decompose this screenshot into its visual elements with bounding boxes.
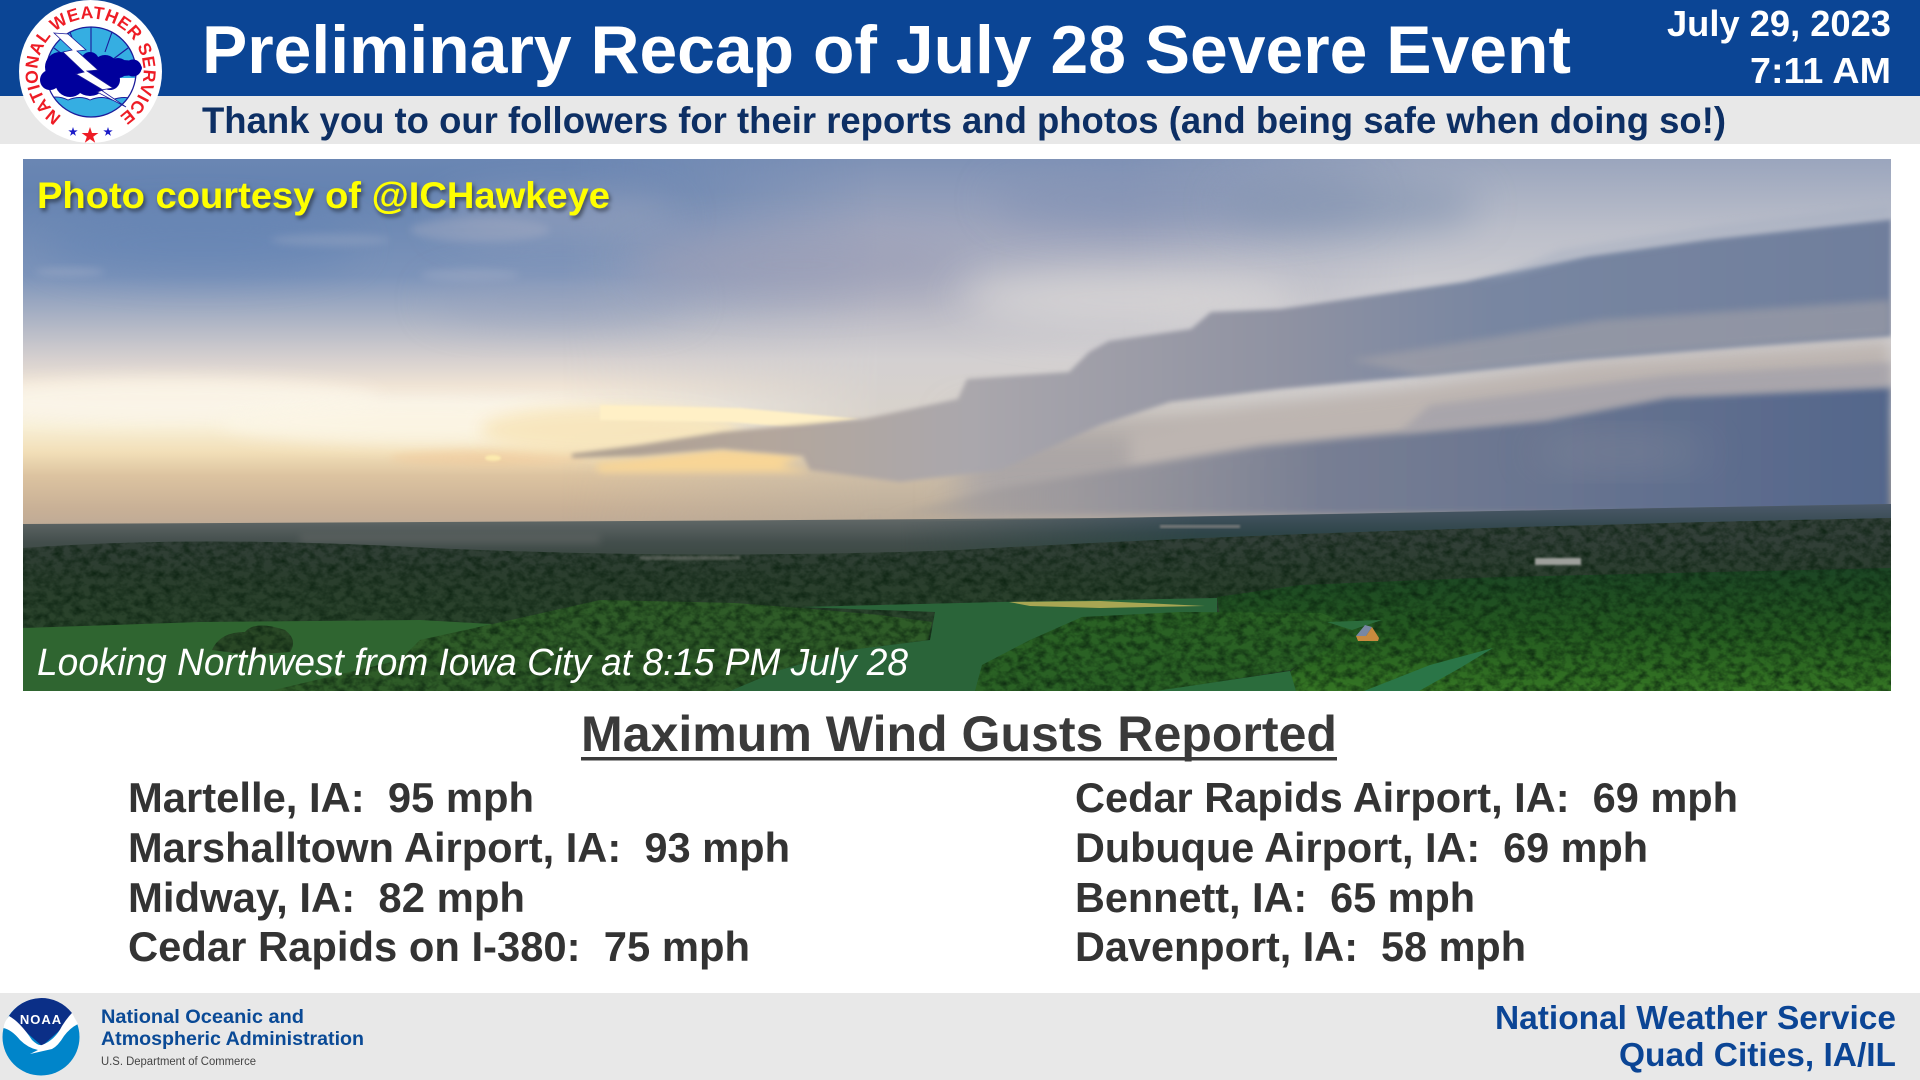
subtitle: Thank you to our followers for their reports and photos (and being safe when doing so!) [202, 99, 1726, 141]
distant hills [23, 504, 1891, 554]
sunset gaps [480, 405, 860, 472]
NOAA agency text: U.S. Department of Commerce [101, 1056, 256, 1068]
dark mid-distance forest [23, 518, 1891, 691]
wind gusts list: right column: Cedar Rapids Airport, IA: 69 mph [1075, 774, 1738, 821]
photo credit caption: Photo courtesy of @ICHawkeye [37, 175, 610, 216]
wind gusts list: right column: Davenport, IA: 58 mph [1075, 923, 1526, 970]
wind gusts list: left column: Marshalltown Airport, IA: 93 mph [128, 824, 790, 871]
centre field [730, 598, 1217, 691]
date and time: 7:11 AM [1750, 50, 1891, 91]
NOAA agency text: Atmospheric Administration [101, 1029, 364, 1050]
distant buildings [640, 525, 1581, 565]
wind gusts list: left column [128, 774, 790, 970]
office name: National Weather Service [1495, 1000, 1896, 1037]
icon: NOAA logo: NOAA [20, 1012, 62, 1027]
NOAA agency text [101, 1007, 364, 1068]
icon: NOAA logo [2, 998, 80, 1076]
sky [0, 159, 1891, 539]
shelf cloud: upper band [572, 205, 1891, 482]
office name: Quad Cities, IA/IL [1619, 1037, 1896, 1074]
near forest left of centre [270, 600, 932, 691]
header banner [0, 0, 1920, 144]
wind gusts list: right column: Dubuque Airport, IA: 69 mph [1075, 824, 1648, 871]
wind gusts list: left column: Midway, IA: 82 mph [128, 874, 525, 921]
left field [23, 620, 510, 691]
wind gusts list: left column: Martelle, IA: 95 mph [128, 774, 534, 821]
icon: National Weather Service logo: NATIONAL WEATHER SERVICE [26, 6, 156, 125]
shelf cloud: tan band and lower dark band [860, 340, 1891, 522]
field strips [1156, 620, 1493, 691]
wind gusts list: right column: Bennett, IA: 65 mph [1075, 874, 1475, 921]
NOAA agency text: National Oceanic and [101, 1007, 304, 1028]
date and time: July 29, 2023 [1667, 3, 1891, 44]
haze under the shelf cloud [948, 402, 1232, 502]
bright forest on the right [1217, 568, 1891, 691]
date and time [1667, 3, 1891, 91]
photo location caption: Looking Northwest from Iowa City at 8:15 PM July 28 [37, 642, 908, 684]
photo: shelf cloud over Iowa City [0, 159, 1891, 691]
icon: house [1356, 625, 1379, 641]
centre forest [975, 612, 1352, 691]
wind gusts list: left column: Cedar Rapids on I-380: 75 mph [128, 923, 750, 970]
footer bar [0, 993, 1920, 1080]
yellow field strip [1009, 601, 1205, 608]
office name [1495, 1000, 1896, 1074]
wind gusts list: right column [1075, 774, 1738, 970]
heading: maximum wind gusts: Maximum Wind Gusts Reported [581, 706, 1337, 762]
title: Preliminary Recap of July 28 Severe Event [202, 12, 1571, 88]
tree clump in left field [212, 625, 293, 655]
